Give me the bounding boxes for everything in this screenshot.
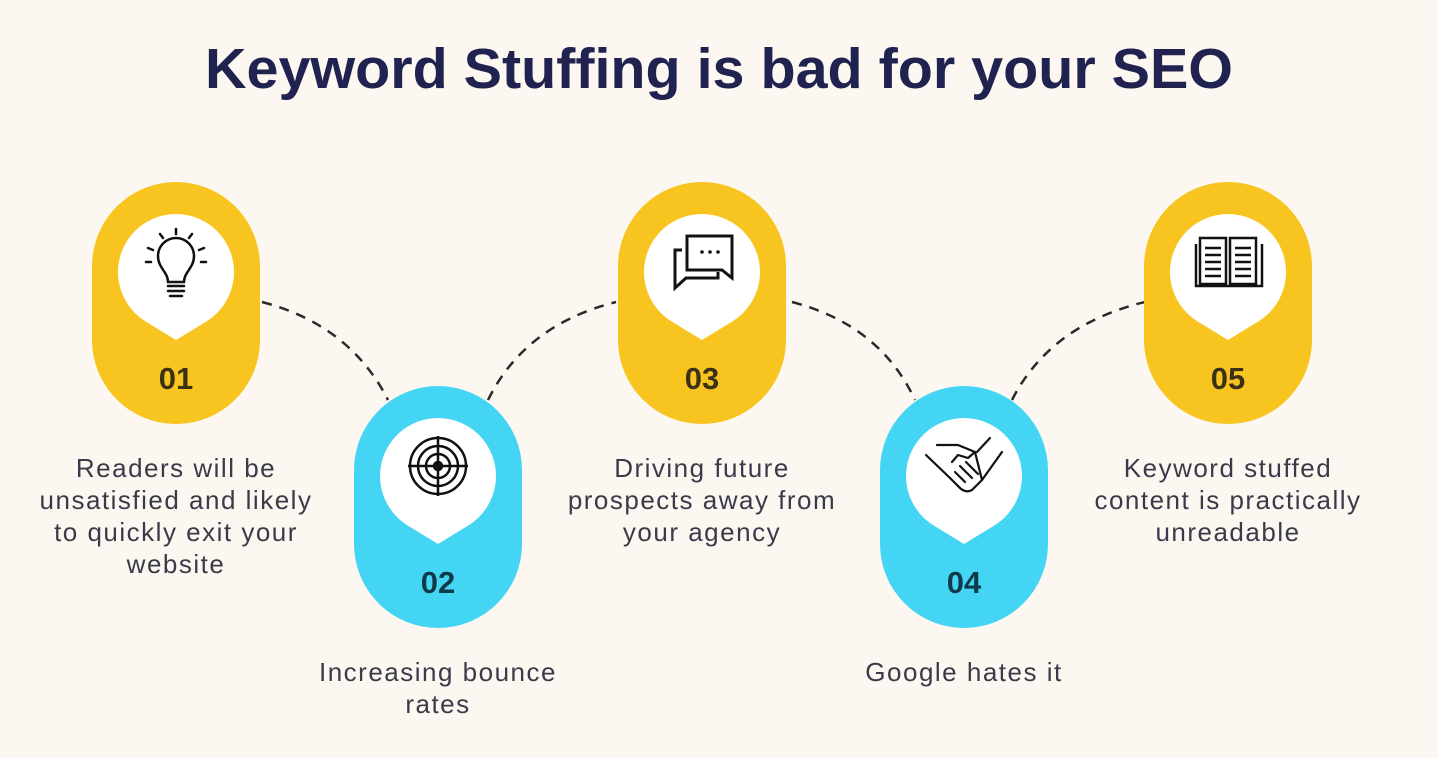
text: step 05: content is practically xyxy=(1094,485,1362,515)
text: step 01: Readers will be xyxy=(76,453,276,483)
text: step 05: unreadable xyxy=(1155,517,1301,547)
panel: step 04 xyxy=(880,386,1048,628)
text: step 01: unsatisfied and likely xyxy=(40,485,312,515)
text: step 03: prospects away from xyxy=(568,485,836,515)
panel: step 02: 02 xyxy=(421,565,455,600)
dashed connector 01-02 xyxy=(262,302,388,400)
panel: step 04: 04 xyxy=(947,565,982,600)
panel: step 05 xyxy=(1144,182,1312,424)
text: step 05: Keyword stuffed xyxy=(1124,453,1332,483)
icon: handshake xyxy=(926,438,1002,491)
text: step 03: your agency xyxy=(623,517,781,547)
dashed connector 03-04 xyxy=(792,302,915,400)
icon: open book xyxy=(1196,238,1262,286)
panel: step 01 xyxy=(92,182,260,424)
dashed connector 02-03 xyxy=(488,302,616,400)
panel: step 05: 05 xyxy=(1211,361,1245,396)
panel: step 03 xyxy=(618,182,786,424)
panel: step 02 xyxy=(354,386,522,628)
text: step 01: to quickly exit your xyxy=(54,517,298,547)
text: step 01: website xyxy=(126,549,225,579)
text: step 02: rates xyxy=(405,689,471,719)
icon: target xyxy=(408,436,468,496)
icon: chat bubbles xyxy=(675,236,732,288)
icon: light bulb xyxy=(146,229,206,296)
title: Keyword Stuffing is bad for your SEO xyxy=(205,37,1233,101)
dashed connector 04-05 xyxy=(1012,302,1145,400)
panel: step 01: 01 xyxy=(159,361,193,396)
text: step 04: Google hates it xyxy=(865,657,1063,687)
panel: step 03: 03 xyxy=(685,361,719,396)
text: step 02: Increasing bounce xyxy=(319,657,557,687)
text: step 03: Driving future xyxy=(614,453,790,483)
